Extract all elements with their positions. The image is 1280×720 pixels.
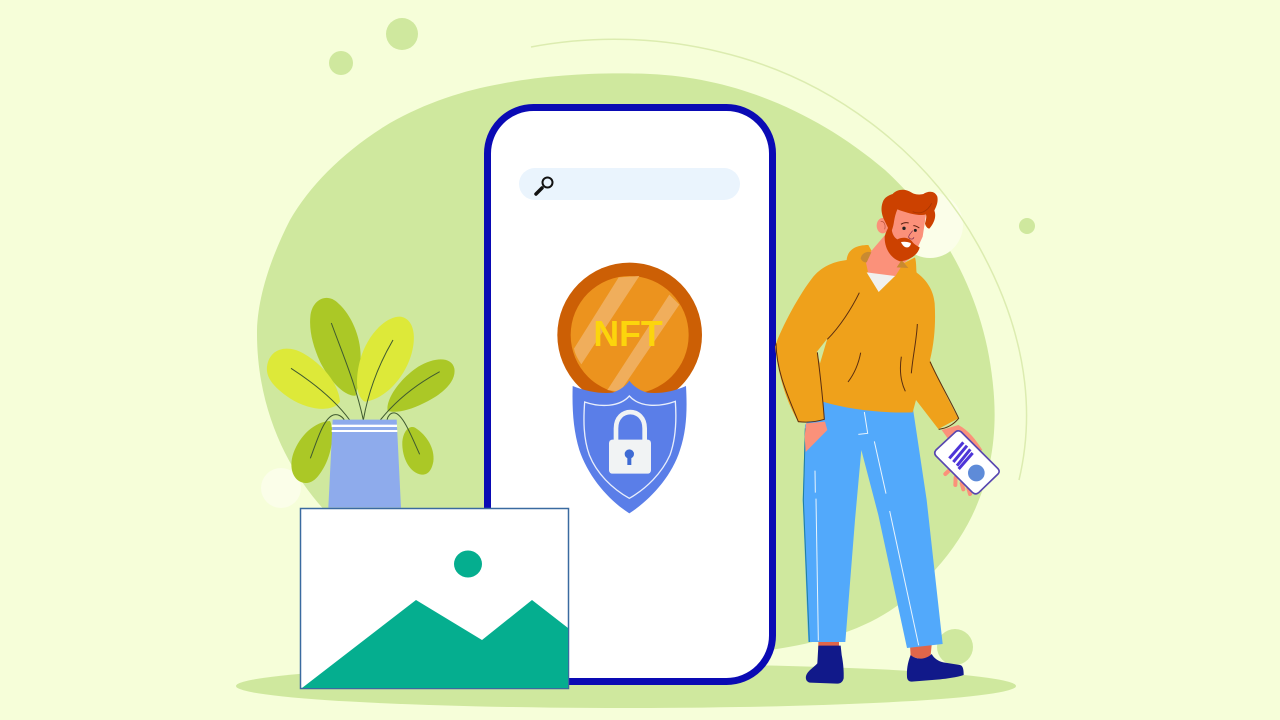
phone	[488, 108, 772, 682]
trouser edge	[803, 428, 809, 642]
eyes and brows	[901, 223, 919, 239]
icon: NFT coin and shield	[557, 263, 702, 513]
hair	[882, 190, 938, 233]
ankles	[818, 638, 932, 660]
shoes	[806, 646, 964, 684]
legs and shoes	[803, 400, 999, 684]
orbit arc	[531, 39, 1027, 480]
hoodie shadows	[861, 252, 908, 268]
small phone	[935, 431, 999, 494]
leaves	[267, 298, 455, 483]
picture sun	[454, 550, 482, 578]
beard	[885, 222, 920, 261]
neck	[865, 235, 915, 277]
vase	[328, 420, 401, 508]
left hand	[805, 422, 827, 452]
padlock	[609, 412, 651, 474]
smile	[901, 242, 911, 247]
t-shirt	[867, 272, 895, 292]
person	[775, 190, 999, 684]
hoodie fold lines	[776, 293, 959, 429]
trouser seams	[815, 412, 919, 645]
background blob	[257, 73, 995, 650]
trousers	[803, 400, 943, 648]
ground ellipse	[236, 664, 1016, 708]
head	[877, 190, 938, 261]
leaf veins	[291, 323, 440, 458]
coin	[557, 263, 702, 407]
hair detail	[913, 203, 932, 213]
search bar	[519, 168, 740, 200]
plant	[267, 298, 455, 508]
shield	[573, 381, 687, 513]
picture card	[300, 508, 568, 688]
decorative circles	[261, 18, 1035, 665]
icon: magnifying glass	[536, 178, 552, 194]
coin label: NFT	[593, 314, 663, 354]
hoodie	[775, 245, 958, 429]
ear	[877, 218, 889, 233]
upper body	[775, 235, 959, 429]
picture mountains	[302, 600, 568, 688]
face	[890, 208, 926, 255]
right hand	[942, 425, 982, 494]
